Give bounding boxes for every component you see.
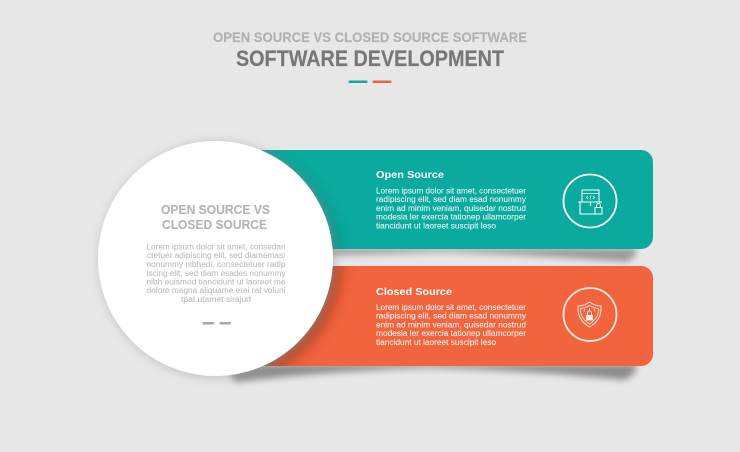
subtitle: OPEN SOURCE VS CLOSED SOURCE SOFTWARE [213, 29, 527, 45]
circle body text: nonummy nibhedi, consectetuer radip [146, 260, 286, 269]
main heading: SOFTWARE DEVELOPMENT [236, 46, 504, 71]
circle body text: dolore magna aliquame erei rat voluni [146, 286, 286, 295]
circle drop shadow on background [99, 142, 335, 378]
circle body text: Lorem ipsum dolor sit amet, consedari [146, 242, 286, 252]
title [213, 29, 527, 83]
closed source body text [376, 303, 526, 347]
icon: shield with padlock [564, 288, 616, 341]
closed source body text: radipiscing elit, sed diam esad nonummy [376, 312, 526, 321]
closed source body text: tiancidunt ut laoreet suscipit leso [376, 338, 497, 347]
closed source body text: modesia ler exercia tationep ullamcorper [376, 329, 526, 338]
circle heading [161, 203, 270, 232]
circle body text: tpat utamet sirajud [181, 295, 251, 304]
circle heading: OPEN SOURCE VS [161, 203, 270, 217]
circle body text: iscing elit, sed diam esades nonummy [146, 269, 286, 278]
closed source body text: Lorem ipsum dolor sit amet, consectetuer [376, 303, 526, 312]
circle shadow on orange panel [263, 266, 348, 366]
open source body text: Lorem ipsum dolor sit amet, consectetuer [376, 186, 526, 196]
open source heading: Open Source [376, 169, 444, 181]
open source body text: radipiscing elit, sed diam esad nonummy [376, 195, 526, 204]
circle body text [146, 242, 286, 304]
open source body text: modesia ler exercia tationep ullamcorper [376, 213, 526, 222]
panel: open source [260, 150, 653, 249]
open source body text [376, 186, 526, 230]
closed source heading: Closed Source [376, 286, 452, 298]
title accent dashes [348, 80, 392, 83]
closed source body text: enim ad minim veniam, quisedar nostrud [376, 320, 526, 329]
icon: code box and padlock [564, 174, 616, 228]
circle body text: nibh euismod tiancidunt ut laoreet me [146, 278, 286, 286]
circle heading: CLOSED SOURCE [162, 218, 267, 232]
circle shadow on teal panel [262, 150, 344, 249]
panel: central circle [98, 141, 333, 376]
open source body text: enim ad minim veniam, quisedar nostrud [376, 204, 526, 213]
shadow under teal panel [300, 248, 636, 262]
circle dashes [202, 322, 231, 324]
shadow under orange panel [225, 364, 636, 382]
circle body text: ctetuer adipiscing elit, sed diamemasi [147, 251, 285, 260]
panel: closed source [263, 266, 653, 366]
open source body text: tiancidunt ut laoreet suscipit leso [376, 221, 497, 230]
